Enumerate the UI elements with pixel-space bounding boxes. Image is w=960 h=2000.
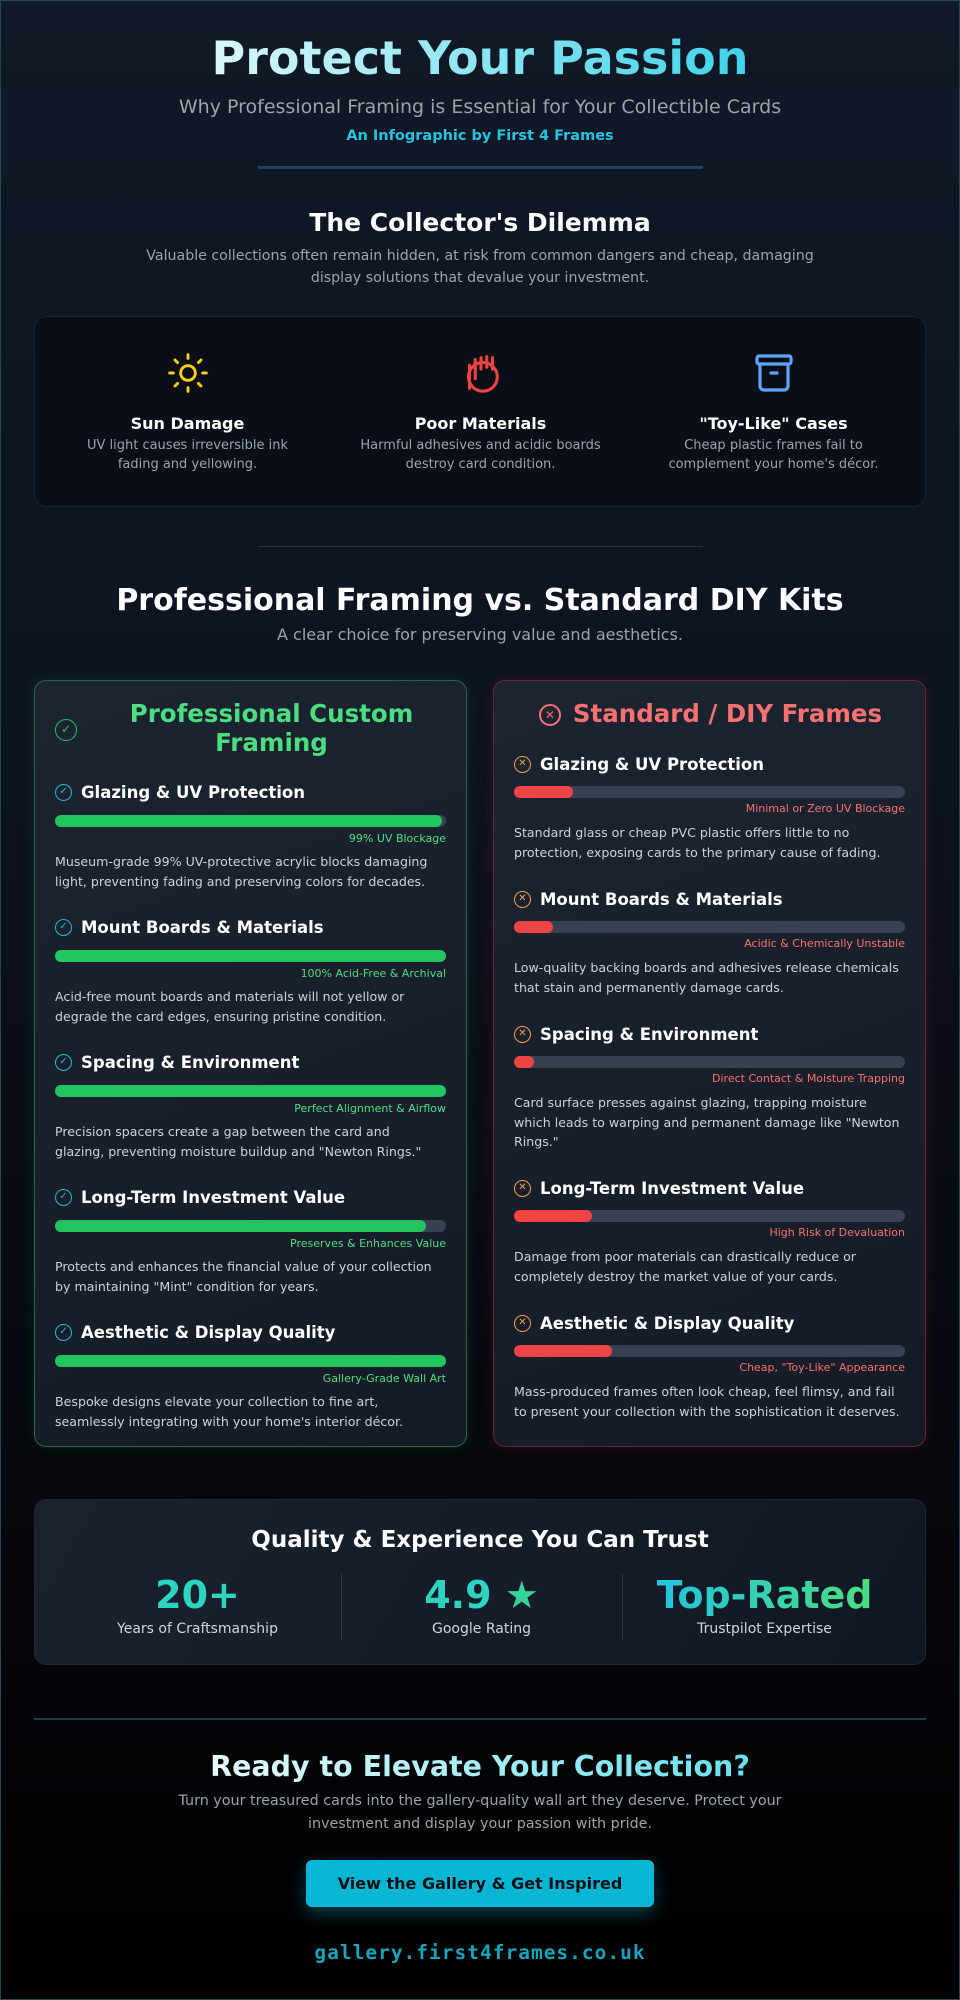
- item: mount: 100% Acid-Free & Archival: [301, 967, 446, 980]
- item: glazing: 99% UV Blockage: [349, 832, 446, 845]
- professional heading: [55, 699, 413, 757]
- item: mount: Acidic & Chemically Unstable: [744, 937, 905, 950]
- panel: professional: Spacing & Environment: [81, 1053, 299, 1072]
- diy heading: Standard / DIY Frames: [573, 699, 882, 728]
- danger: cases: Cheap plastic frames fail to: [684, 438, 863, 453]
- byline: An Infographic by First 4 Frames: [346, 128, 614, 144]
- danger: sun: Sun Damage: [131, 414, 244, 433]
- panel: diy: ✕: [518, 1182, 527, 1193]
- item: mount: [55, 918, 446, 1024]
- dilemma text: Valuable collections often remain hidden, at risk from common dangers and cheap, damaging: [146, 248, 814, 264]
- stat: years: [117, 1573, 278, 1637]
- item: aesthetic: [514, 1314, 905, 1418]
- danger: cases: "Toy-Like" Cases: [699, 414, 848, 433]
- item: spacing: Perfect Alignment & Airflow: [294, 1102, 446, 1115]
- icon: sun: [168, 353, 208, 393]
- panel: trust: [34, 1499, 926, 1665]
- icon: box: [755, 354, 793, 392]
- stat: years: 20+: [155, 1573, 240, 1617]
- danger: materials: Harmful adhesives and acidic boards: [360, 438, 601, 453]
- trust heading: Quality & Experience You Can Trust: [251, 1527, 709, 1553]
- stat: rating: 4.9 ★: [424, 1573, 539, 1617]
- heading: dilemma: The Collector's Dilemma: [309, 208, 651, 237]
- dilemma text: [146, 248, 814, 286]
- subtitle: Why Professional Framing is Essential for Your Collectible Cards: [179, 96, 781, 118]
- item: spacing: Precision spacers create a gap between the card and glazing, preventing moisture buildup and "Newton Rings.": [55, 1124, 421, 1158]
- panel: diy: Glazing & UV Protection: [540, 755, 764, 774]
- button: View the Gallery & Get Inspired: [338, 1874, 622, 1893]
- panel: diy: Aesthetic & Display Quality: [540, 1314, 794, 1333]
- panel: diy: ✕: [518, 1028, 527, 1039]
- panel: professional: ✓: [59, 921, 68, 932]
- panel: professional: ✓: [59, 1326, 68, 1337]
- panel: diy: Spacing & Environment: [540, 1025, 758, 1044]
- cta text: investment and display your passion with pride.: [308, 1816, 652, 1832]
- panel: diy: ✕: [518, 893, 527, 904]
- panel: dangers: [34, 316, 926, 507]
- stat: years: Years of Craftsmanship: [117, 1621, 278, 1637]
- danger: cases: complement your home's décor.: [668, 457, 879, 472]
- item: glazing: [55, 783, 446, 888]
- item: investment: High Risk of Devaluation: [769, 1226, 905, 1239]
- stat: rating: Google Rating: [432, 1621, 531, 1637]
- panel: diy: ✕: [518, 1317, 527, 1328]
- stat: top-rated: [656, 1573, 872, 1637]
- item: aesthetic: Bespoke designs elevate your collection to fine art, seamlessly integrating with your home's interior décor.: [55, 1394, 403, 1428]
- panel: professional: ✓: [59, 786, 68, 797]
- heading: comparison: Professional Framing vs. Standard DIY Kits: [116, 583, 844, 618]
- professional heading: ✓: [61, 722, 71, 736]
- panel: professional: Mount Boards & Materials: [81, 918, 324, 937]
- item: glazing: Museum-grade 99% UV-protective acrylic blocks damaging light, preventing fading and preserving colors for decades.: [55, 854, 427, 888]
- dilemma text: display solutions that devalue your investment.: [311, 270, 649, 286]
- button: [306, 1860, 654, 1907]
- item: glazing: Standard glass or cheap PVC plastic offers little to no protection, exposing cards to the primary cause of fading.: [514, 825, 881, 860]
- panel: diy: Long-Term Investment Value: [540, 1179, 804, 1198]
- professional heading: Professional Custom: [130, 699, 413, 728]
- danger: sun: fading and yellowing.: [118, 457, 257, 472]
- danger: sun: [87, 353, 288, 472]
- stat: rating: [424, 1573, 539, 1637]
- danger: materials: destroy card condition.: [406, 457, 555, 472]
- item: spacing: [55, 1053, 446, 1158]
- url: gallery.first4frames.co.uk: [314, 1941, 646, 1964]
- item: investment: Protects and enhances the financial value of your collection by maintaining "Mint" condition for years.: [55, 1259, 432, 1294]
- diy heading: ✕: [545, 708, 555, 722]
- item: mount: Low-quality backing boards and adhesives release chemicals that stain and permanently damage cards.: [514, 960, 899, 994]
- stat: top-rated: Trustpilot Expertise: [697, 1621, 832, 1637]
- danger: cases: [668, 354, 879, 472]
- item: aesthetic: Gallery-Grade Wall Art: [323, 1372, 446, 1385]
- item: aesthetic: [55, 1323, 446, 1428]
- item: glazing: Minimal or Zero UV Blockage: [746, 802, 905, 815]
- panel: diy: [493, 680, 926, 1447]
- panel: professional: Aesthetic & Display Quality: [81, 1323, 335, 1342]
- item: glazing: [514, 755, 905, 860]
- panel: professional: ✓: [59, 1191, 68, 1202]
- professional heading: Framing: [215, 728, 328, 757]
- panel: diy: ✕: [518, 758, 527, 769]
- item: mount: Acid-free mount boards and materials will not yellow or degrade the card edges, ensuring pristine condition.: [55, 989, 404, 1024]
- item: spacing: Direct Contact & Moisture Trapping: [712, 1072, 905, 1085]
- danger: sun: UV light causes irreversible ink: [87, 438, 288, 453]
- panel: professional: Glazing & UV Protection: [81, 783, 305, 802]
- item: investment: [55, 1188, 446, 1294]
- item: investment: Preserves & Enhances Value: [290, 1237, 446, 1250]
- cta heading: Ready to Elevate Your Collection?: [210, 1750, 750, 1783]
- item: spacing: Card surface presses against glazing, trapping moisture which leads to warping and permanent damage like "Newton Rings.": [514, 1095, 899, 1149]
- item: investment: Damage from poor materials can drastically reduce or completely destroy the market value of your cards.: [514, 1249, 856, 1284]
- item: aesthetic: Mass-produced frames often look cheap, feel flimsy, and fail to present your collection with the sophistication it deserves.: [514, 1384, 900, 1418]
- icon: hand: [467, 355, 499, 393]
- danger: materials: Poor Materials: [415, 414, 546, 433]
- danger: materials: [360, 355, 601, 472]
- panel: professional: Long-Term Investment Value: [81, 1188, 345, 1207]
- stat: top-rated: Top-Rated: [656, 1573, 872, 1617]
- item: investment: [514, 1179, 905, 1284]
- cta text: [178, 1793, 782, 1832]
- cta text: Turn your treasured cards into the gallery-quality wall art they deserve. Protect your: [178, 1793, 782, 1809]
- title: Protect Your Passion: [212, 31, 748, 85]
- item: mount: [514, 890, 905, 994]
- panel: professional: ✓: [59, 1056, 68, 1067]
- panel: professional: [34, 680, 467, 1447]
- item: spacing: [514, 1025, 905, 1149]
- comparison subtitle: A clear choice for preserving value and aesthetics.: [277, 625, 683, 644]
- panel: diy: Mount Boards & Materials: [540, 890, 783, 909]
- item: aesthetic: Cheap, "Toy-Like" Appearance: [739, 1361, 905, 1374]
